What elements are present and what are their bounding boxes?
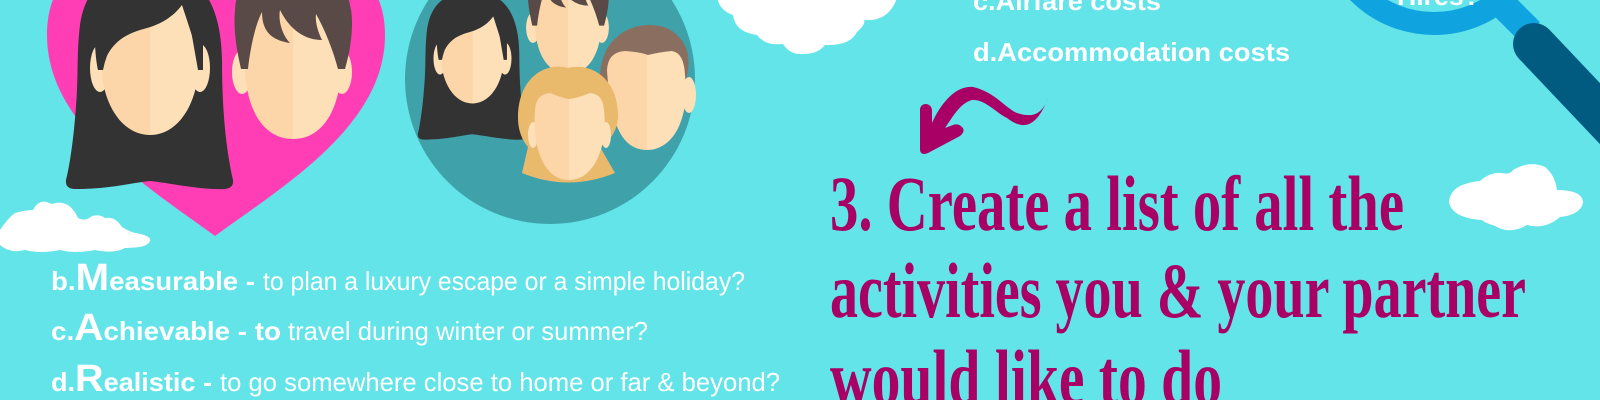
list: trip costs — [973, 0, 1290, 67]
arrow: curved magenta — [920, 87, 1048, 154]
text: measurable: b.Measurable - — [51, 257, 255, 299]
list: SMART goals — [51, 257, 780, 400]
icon: man — [232, 0, 352, 139]
icon: woman — [66, 0, 233, 189]
icon: cloud right — [1449, 164, 1583, 230]
text: realistic — [51, 358, 780, 400]
icon: cloud top centre — [717, 0, 898, 54]
icon: magnifying glass — [1328, 0, 1600, 140]
heading: step 3 — [830, 160, 1526, 400]
text: measurable: to plan a luxury escape or a simple holiday? — [263, 266, 745, 296]
icon: cloud bottom left — [0, 202, 150, 252]
text: achievable — [51, 307, 648, 349]
icon: blonde woman — [518, 67, 618, 182]
text: measurable — [51, 257, 745, 299]
icon: small man — [526, 0, 609, 74]
icon: family circle — [405, 0, 696, 224]
heart shape — [47, 0, 385, 236]
connector — [1500, 2, 1530, 32]
text: achievable: c.Achievable - to — [51, 307, 281, 349]
icon: small woman — [418, 0, 527, 140]
text: achievable: travel during winter or summer? — [288, 316, 648, 346]
icon: brown-haired man — [600, 25, 696, 150]
icon: heart with couple — [47, 0, 385, 236]
heading line 1: 3. Create a list of all the — [830, 160, 1404, 247]
text: accommodation costs: d.Accommodation costs — [973, 37, 1290, 67]
handle — [1534, 44, 1600, 140]
text: realistic: to go somewhere close to home or far & beyond? — [220, 367, 780, 397]
teal circle — [405, 0, 695, 224]
text: realistic: d.Realistic - — [51, 358, 212, 400]
lens ring — [1328, 0, 1540, 24]
